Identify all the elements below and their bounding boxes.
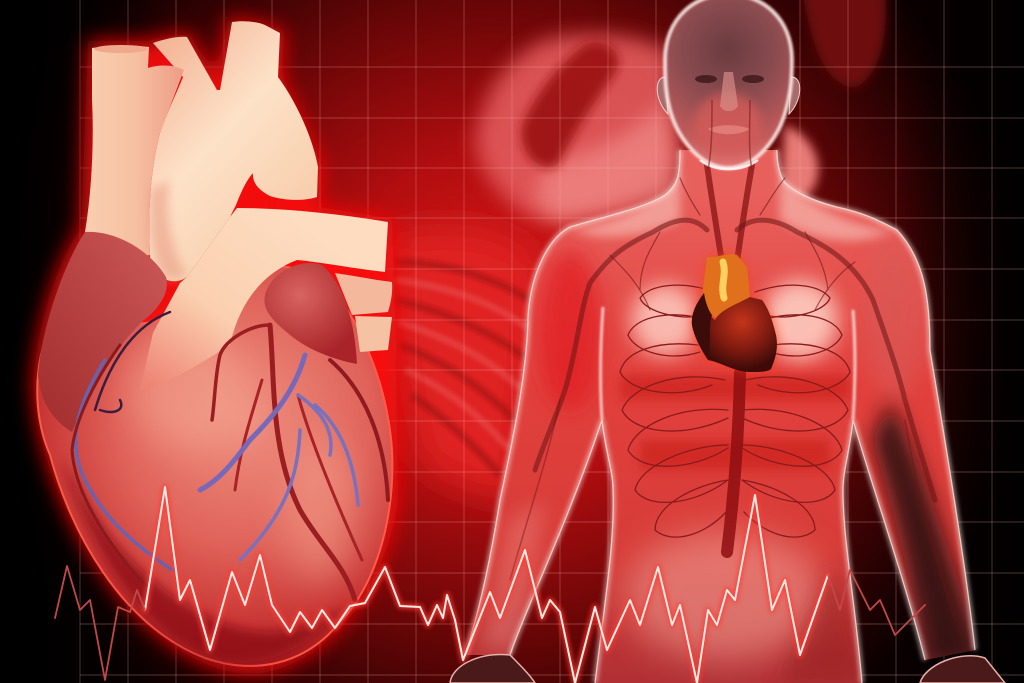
lower heart shading — [60, 455, 345, 663]
small aorta highlight — [723, 262, 724, 298]
superior vena cava with branch — [85, 46, 184, 262]
faint background heart — [390, 0, 886, 500]
heart main muscle — [37, 265, 392, 666]
left atrial appendage — [264, 263, 357, 364]
arm branches — [510, 400, 955, 620]
ribs right — [742, 285, 850, 537]
lower torso right shade — [784, 566, 860, 683]
pale curve right of neck — [780, 125, 818, 207]
large heart — [37, 21, 394, 670]
face glow — [694, 93, 762, 157]
pulmonary artery — [140, 208, 388, 390]
lighter central muscle — [130, 330, 250, 450]
abdomen pale — [625, 530, 825, 660]
right atrium — [38, 232, 167, 432]
left upper arm red — [538, 250, 602, 410]
mid red bands — [620, 375, 850, 470]
heart glow — [37, 22, 394, 670]
aorta descending — [727, 373, 740, 552]
nose — [720, 72, 738, 111]
hands — [450, 655, 1005, 683]
aorta shadow — [149, 180, 187, 280]
torso and arms — [465, 150, 985, 683]
chest glow — [631, 284, 699, 356]
neck arteries — [707, 165, 752, 262]
head rim — [665, 0, 792, 168]
inner torso rim highlights — [601, 307, 855, 420]
dark red blob top right — [800, 0, 886, 88]
fan shaped streaks — [390, 229, 535, 500]
circulatory vessels — [510, 165, 955, 620]
small heart vessels — [692, 254, 777, 372]
small heart ventricles — [692, 293, 777, 372]
coronary vessels — [72, 312, 388, 600]
ribs left — [620, 285, 728, 537]
pale heart swath — [476, 35, 680, 219]
neck and shoulder branches — [610, 178, 855, 310]
body rim glow — [465, 150, 975, 683]
pulmonary vein upper — [335, 273, 392, 315]
mouth — [708, 125, 750, 134]
small heart — [692, 254, 777, 372]
vena cava opening — [94, 45, 148, 53]
dark lobe — [522, 42, 619, 168]
ECG core — [145, 487, 828, 683]
left forearm pale — [480, 500, 545, 650]
pulmonary vein lower — [355, 316, 392, 352]
face vessels — [708, 100, 752, 170]
aorta — [149, 21, 318, 281]
great vessels — [85, 21, 392, 390]
head — [657, 0, 800, 170]
ears — [657, 77, 800, 114]
right upper arm pale — [870, 262, 920, 396]
right arm shadow — [872, 400, 985, 670]
ECG glow — [145, 487, 828, 683]
eyes — [695, 75, 717, 83]
human figure — [465, 0, 985, 683]
chin arc — [700, 160, 758, 169]
shoulder highlight — [570, 170, 895, 241]
subclavian arteries — [535, 220, 707, 470]
ECG faded tails — [55, 566, 925, 680]
ECG heartbeat line — [55, 487, 925, 683]
